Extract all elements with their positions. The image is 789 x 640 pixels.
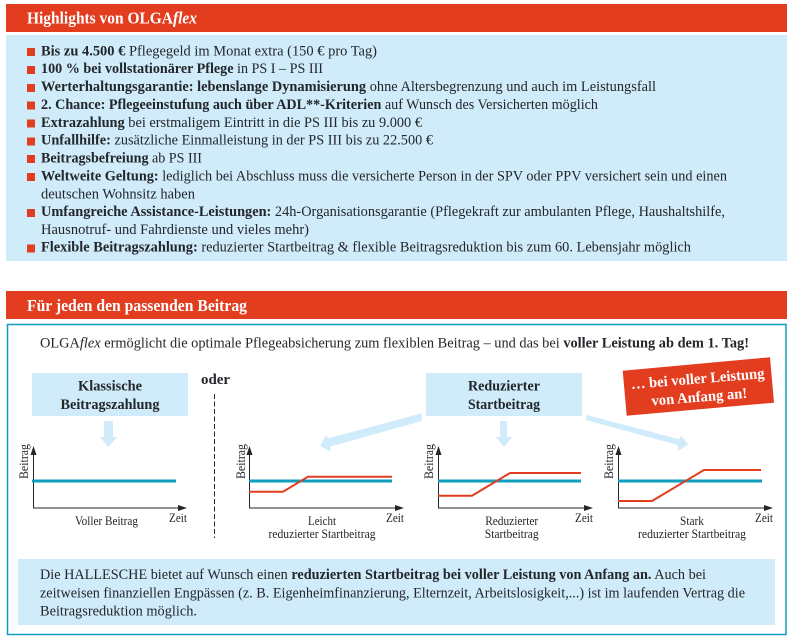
chart: reduziert (421, 444, 593, 541)
arrow: reduziert down (496, 421, 512, 447)
chart: leicht reduziert: Zeit (386, 510, 404, 525)
item 9 (27, 204, 725, 238)
box: klassische Beitragszahlung (32, 373, 188, 416)
chart: stark reduziert: reduzierter Startbeitrag (638, 526, 746, 541)
note box: Beitragsreduktion möglich. (40, 604, 197, 620)
chart: reduziert: Beitrag (421, 444, 436, 479)
callout: bei voller Leistung: von Anfang an! (651, 386, 748, 410)
panel: highlights list (6, 35, 787, 261)
item 6: Unfallhilfe: zusätzliche Einmalleistung in der PS III bis zu 22.500 € (41, 133, 433, 149)
header: highlights (6, 4, 787, 32)
chart: leicht reduziert: reduzierter Startbeitrag (268, 526, 376, 541)
box: klassische Beitragszahlung: Klassische (78, 379, 142, 395)
header: highlights: Highlights von OLGAflex (27, 8, 197, 28)
note box: zeitweisen finanziellen Engpässen (z. B. Eigenheimfinanzierung, Elternzeit, Arbeitslosigkeit,...) ist im laufenden Vertrag die (40, 586, 745, 602)
box: reduzierter Startbeitrag (426, 373, 582, 416)
label: oder: oder (201, 372, 230, 388)
chart: voller Beitrag: Voller Beitrag (75, 513, 138, 528)
header: passender Beitrag (6, 291, 787, 319)
chart: stark reduziert (601, 444, 773, 541)
chart: voller Beitrag (16, 444, 187, 528)
intro text: OLGAflex ermöglicht die optimale Pflegeabsicherung zum flexiblen Beitrag – und das bei voller Leistung ab dem 1. Tag! (40, 336, 749, 352)
item 2: 100 % bei vollstationärer Pflege in PS I – PS III (41, 61, 323, 77)
chart: stark reduziert: Stark (680, 513, 704, 528)
item 10: Flexible Beitragszahlung: reduzierter Startbeitrag & flexible Beitragsreduktion bis zum 60. Lebensjahr möglich (41, 240, 691, 256)
callout: bei voller Leistung (623, 357, 774, 416)
item 7: Beitragsbefreiung ab PS III (41, 151, 202, 167)
item 8 (27, 169, 727, 203)
header: passender Beitrag: Für jeden den passenden Beitrag (27, 296, 247, 315)
chart: stark reduziert: Beitrag (601, 444, 616, 479)
item 9: Hausnotruf- und Fahrdienste und vieles mehr) (41, 222, 309, 238)
item 8: Weltweite Geltung: lediglich bei Abschluss muss die versicherte Person in der SPV oder PPV versichert sein und einen (41, 169, 727, 185)
item 8: deutschen Wohnsitz haben (41, 187, 195, 203)
item 9: Umfangreiche Assistance-Leistungen: 24h-Organisationsgarantie (Pflegekraft zur ambulanten Pflege, Haushaltshilfe, (41, 204, 725, 220)
item 3: Werterhaltungsgarantie: lebenslange Dynamisierung ohne Altersbegrenzung und auch im Leistungsfall (41, 79, 656, 95)
chart: leicht reduziert: Beitrag (233, 444, 248, 479)
chart: reduziert: Startbeitrag (485, 526, 539, 541)
panel: contribution frame (8, 324, 786, 634)
chart: leicht reduziert: Leicht (308, 513, 336, 528)
chart: voller Beitrag: Zeit (169, 510, 187, 525)
arrow: to stark reduziert (586, 415, 688, 451)
chart: reduziert: Zeit (575, 510, 593, 525)
chart: leicht reduziert (233, 444, 404, 541)
box: reduzierter Startbeitrag: Reduzierter (468, 379, 540, 395)
note box: Die HALLESCHE bietet auf Wunsch einen reduzierten Startbeitrag bei voller Leistung von Anfang an. Auch bei (40, 567, 706, 583)
item 5: Extrazahlung bei erstmaligem Eintritt in die PS III bis zu 9.000 € (41, 115, 422, 131)
arrow: klassisch down (100, 421, 117, 447)
item 4: 2. Chance: Pflegeeinstufung auch über ADL**-Kriterien auf Wunsch des Versicherten möglich (41, 97, 598, 113)
box: klassische Beitragszahlung: Beitragszahlung (60, 397, 160, 413)
chart: reduziert: Reduzierter (485, 513, 539, 528)
note box (18, 559, 775, 625)
chart: stark reduziert: Zeit (755, 510, 773, 525)
arrow: to leicht reduziert (320, 413, 422, 452)
box: reduzierter Startbeitrag: Startbeitrag (468, 397, 540, 413)
chart: voller Beitrag: Beitrag (16, 444, 31, 479)
item 1: Bis zu 4.500 € Pflegegeld im Monat extra (150 € pro Tag) (41, 44, 377, 60)
callout: bei voller Leistung: … bei voller Leistung (630, 366, 766, 393)
